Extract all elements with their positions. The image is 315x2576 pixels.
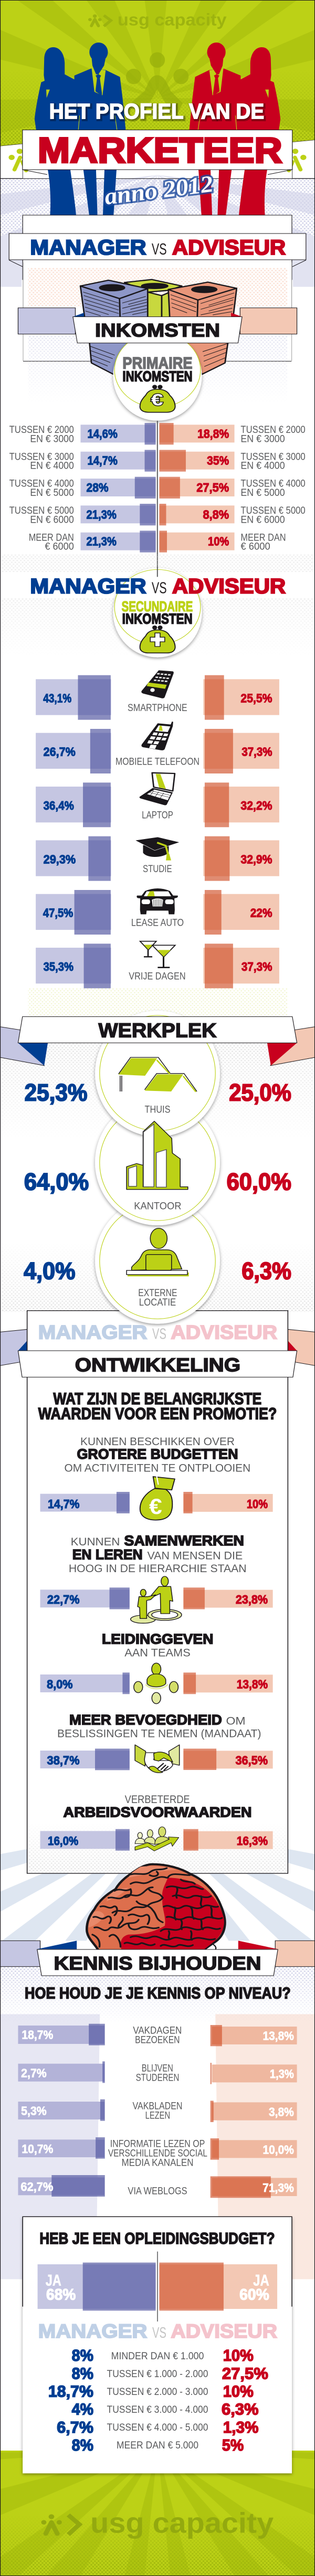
- section 3: secundaire inkomsten: [2, 555, 313, 773]
- row: leidinggeven bars: [40, 1672, 273, 1694]
- watermark: usg figure: [126, 52, 188, 119]
- label: externe locatie: [138, 1287, 177, 1308]
- label: primaire inkomsten: PRIMAIRE: [122, 354, 193, 373]
- icon: cocktail glasses: [140, 941, 175, 968]
- question: belangrijkste waarden: [38, 1390, 277, 1423]
- row: minder dan 1000: 8%: [72, 2346, 93, 2365]
- row: via weblogs: 71,3%: [262, 2181, 294, 2195]
- row: 3000 tot 4000: [72, 2400, 258, 2418]
- row: via weblogs: VIA WEBLOGS: [128, 2186, 187, 2197]
- row: lease auto: [36, 888, 279, 935]
- row: minder dan 1000: MINDER DAN € 1.000: [111, 2350, 204, 2362]
- numbers: werkplek percentages: 64,0%: [24, 1169, 89, 1195]
- banner: ontwikkeling: [18, 1351, 297, 1377]
- row: laptop: LAPTOP: [142, 810, 173, 821]
- row: vakbladen lezen: VAKBLADEN: [133, 2101, 182, 2112]
- table: opleidingsbudget bedragen: [48, 2346, 268, 2454]
- row: 3000 tot 4000: 6,3%: [222, 2400, 258, 2418]
- banner: inkomsten: [73, 317, 242, 343]
- row: vakdagen bezoeken: [18, 2024, 297, 2046]
- row: via weblogs: [18, 2175, 297, 2198]
- panel: ontwikkeling: [27, 1311, 288, 1873]
- icon: graduation cap: [135, 837, 180, 861]
- heading: manager vs adviseur: VS: [152, 579, 167, 597]
- heading: manager vs adviseur top banner: MANAGER: [30, 236, 146, 259]
- row: lease auto: LEASE AUTO: [131, 917, 184, 928]
- icon: office buildings: [127, 1121, 188, 1190]
- row: tussen 3000 en 4000: 35%: [207, 454, 229, 468]
- heading: manager vs adviseur faded: ADVISEUR: [171, 2320, 277, 2342]
- banner: ontwikkeling: ONTWIKKELING: [75, 1355, 240, 1376]
- row: grotere budgetten bars: 10%: [247, 1498, 268, 1511]
- row: meer dan 6000: MEER DAN: [29, 532, 74, 543]
- circle: secundaire inkomsten: INKOMSTEN: [122, 611, 193, 627]
- circle: thuis: [95, 1011, 220, 1137]
- ribbon ends: werkplek: [0, 1027, 315, 1066]
- row: 4000 tot 5000: [57, 2418, 258, 2436]
- text: meer bevoegdheid: BESLISSINGEN TE NEMEN (MANDAAT): [57, 1727, 261, 1740]
- row: 4000 tot 5000: TUSSEN € 4.000 - 5.000: [107, 2422, 208, 2433]
- row: informatie lezen op social media: [18, 2137, 297, 2168]
- heading: manager vs adviseur faded: [38, 2320, 277, 2342]
- row: tussen 5000 en 6000: 8,8%: [203, 508, 229, 522]
- heading: manager vs adviseur faded: MANAGER: [38, 1321, 147, 1343]
- row: informatie lezen op social media: 10,0%: [263, 2143, 294, 2157]
- heading: manager vs adviseur: MANAGER: [30, 575, 146, 598]
- row: laptop: 32,2%: [240, 799, 272, 813]
- row: tussen 4000 en 5000: EN € 5000: [30, 487, 74, 499]
- heading: manager vs adviseur top banner: VS: [152, 240, 167, 258]
- icon: car: [136, 888, 178, 914]
- label: primaire inkomsten: [122, 354, 193, 385]
- section 2: inkomsten: [9, 215, 306, 577]
- row: laptop: [36, 773, 279, 827]
- row: vakdagen bezoeken: 18,7%: [22, 2028, 53, 2042]
- row: meer dan 6000: MEER DAN: [240, 532, 286, 543]
- row: informatie lezen op social media: VERSCHILLENDE SOCIAL: [108, 2148, 207, 2159]
- text: grotere budgetten: KUNNEN BESCHIKKEN OVER: [80, 1435, 235, 1448]
- circle: secundaire inkomsten: SECUNDAIRE: [122, 599, 193, 615]
- row: leidinggeven bars: 8,0%: [47, 1678, 73, 1691]
- circle: kantoor: [95, 1099, 220, 1225]
- bar: manager ja 68%: 68%: [46, 2286, 76, 2303]
- bar: adviseur ja 60%: 60%: [239, 2286, 269, 2303]
- row: informatie lezen op social media: INFORMATIE LEZEN OP: [110, 2138, 205, 2149]
- heading: manager vs adviseur top banner: ADVISEUR: [172, 236, 286, 259]
- bar: adviseur ja 60%: JA: [253, 2272, 269, 2289]
- heading: manager vs adviseur: [30, 575, 286, 598]
- title line: het profiel van de: HET PROFIEL VAN DE: [49, 100, 264, 123]
- row: grotere budgetten bars: 14,7%: [48, 1498, 80, 1511]
- text: samenwerken en leren: HOOG IN DE HIERARCHIE STAAN: [69, 1562, 247, 1575]
- row: tussen 3000 en 4000: 14,7%: [87, 454, 118, 468]
- row: mobiele telefoon: MOBIELE TELEFOON: [116, 756, 200, 767]
- row: studie: 32,9%: [240, 853, 272, 866]
- halftone background: [2, 555, 313, 656]
- column backgrounds: [0, 2014, 315, 2279]
- row: blijven studeren: 2,7%: [21, 2066, 47, 2080]
- row: vrije dagen: 35,3%: [44, 960, 74, 974]
- row: tussen 2000 en 3000: EN € 3000: [240, 433, 285, 444]
- row: minder dan 1000: 10%: [223, 2346, 254, 2365]
- row: blijven studeren: [18, 2061, 297, 2084]
- row: vrije dagen: 37,3%: [242, 960, 272, 974]
- panel: inkomsten background: [22, 215, 293, 380]
- row: smartphone: [36, 670, 279, 720]
- row: tussen 2000 en 3000: 18,8%: [197, 427, 229, 441]
- heading: manager vs adviseur faded: VS: [152, 2324, 166, 2341]
- row: minder dan 1000: [72, 2346, 254, 2365]
- bar: manager ja 68%: [38, 2263, 156, 2310]
- row: 2000 tot 3000: 10%: [223, 2382, 254, 2400]
- row: meer dan 6000: 10%: [208, 535, 229, 548]
- row: studie: STUDIE: [143, 863, 172, 875]
- text: samenwerken en leren: SAMENWERKEN: [124, 1533, 244, 1549]
- icon: houses: [119, 1057, 197, 1092]
- silhouette: adviseur couple (red): [189, 43, 280, 227]
- row: tussen 3000 en 4000: TUSSEN € 3000: [9, 451, 74, 462]
- heading: manager vs adviseur top banner: [9, 234, 306, 267]
- header background: green sunburst: [0, 0, 315, 147]
- row: meer dan 5000: 5%: [222, 2436, 244, 2454]
- text: meer bevoegdheid: OM: [226, 1714, 246, 1727]
- title banner: marketeer: MARKETEER: [38, 131, 282, 170]
- row: bevoegdheid bars: 38,7%: [47, 1754, 80, 1767]
- text: arbeidsvoorwaarden: [64, 1793, 251, 1820]
- icon: money bag: [140, 1476, 175, 1520]
- row: 1000 tot 2000: 27,5%: [222, 2364, 268, 2382]
- icon: green logo fragments left and right of banner: [8, 149, 307, 171]
- section 10: opleidingsbudget panel: [23, 2217, 292, 2473]
- text: grotere budgetten: [64, 1435, 250, 1474]
- heading: manager vs adviseur faded: VS: [152, 1326, 166, 1342]
- row: meer dan 5000: MEER DAN € 5.000: [117, 2440, 198, 2451]
- ribbon ends: inkomsten: [18, 308, 297, 334]
- row: smartphone: 43,1%: [43, 692, 71, 705]
- row: meer dan 6000: [29, 531, 286, 553]
- row: vakdagen bezoeken: VAKDAGEN: [133, 2025, 182, 2036]
- logo: usg capacity (top): usg capacity: [118, 10, 227, 29]
- row: blijven studeren: STUDEREN: [136, 2072, 179, 2083]
- banner: werkplek: [18, 1016, 297, 1043]
- text: grotere budgetten: OM ACTIVITEITEN TE ONTPLOOIEN: [64, 1461, 250, 1474]
- icon: brain: [87, 1864, 225, 1950]
- footer: green sunburst: [0, 2449, 315, 2576]
- row: tussen 4000 en 5000: [9, 477, 306, 499]
- row: 2000 tot 3000: TUSSEN € 2.000 - 3.000: [107, 2386, 208, 2398]
- row: 1000 tot 2000: [72, 2364, 268, 2382]
- row: bevoegdheid bars: [40, 1748, 273, 1770]
- row: meer dan 6000: € 6000: [240, 541, 270, 552]
- row: tussen 3000 en 4000: [9, 450, 306, 472]
- icon: purse with euro: €: [151, 391, 163, 409]
- text: samenwerken en leren: [69, 1533, 247, 1575]
- row: samenwerken bars: 22,7%: [47, 1593, 80, 1607]
- circle: secundaire inkomsten: [113, 567, 202, 658]
- heading: manager vs adviseur faded: ADVISEUR: [171, 1321, 277, 1343]
- icon: purse with plus: [140, 626, 175, 653]
- heading: manager vs adviseur faded: MANAGER: [38, 2320, 147, 2342]
- row: tussen 4000 en 5000: 28%: [87, 481, 109, 495]
- text: arbeidsvoorwaarden: ARBEIDSVOORWAARDEN: [64, 1805, 251, 1820]
- row: 4000 tot 5000: 1,3%: [223, 2418, 258, 2436]
- numbers: werkplek percentages: [24, 1079, 291, 1285]
- numbers: werkplek percentages: 25,3%: [25, 1079, 87, 1106]
- section 7: promotie rows: [40, 1435, 273, 1704]
- section 9: kennis bijhouden: [0, 1941, 315, 2279]
- row: tussen 2000 en 3000: [9, 423, 306, 444]
- icon: stacks of banknotes: [80, 280, 237, 374]
- label: externe locatie: EXTERNE: [138, 1287, 177, 1299]
- row: vakbladen lezen: [18, 2100, 297, 2122]
- bar: manager ja 68%: JA: [46, 2272, 61, 2289]
- text: samenwerken en leren: KUNNEN: [71, 1535, 120, 1548]
- banner: inkomsten: INKOMSTEN: [95, 320, 220, 341]
- row: leidinggeven bars: 13,8%: [237, 1678, 268, 1691]
- text: samenwerken en leren: VAN MENSEN DIE: [147, 1549, 243, 1562]
- section 4: secundaire inkomsten rows: [36, 773, 279, 988]
- row: tussen 4000 en 5000: 27,5%: [196, 481, 229, 495]
- text: arbeidsvoorwaarden: VERBETERDE: [125, 1793, 190, 1806]
- circle: externe locatie: [95, 1198, 220, 1324]
- row: 1000 tot 2000: TUSSEN € 1.000 - 2.000: [107, 2368, 208, 2380]
- row: studie: 29,3%: [44, 853, 76, 866]
- numbers: werkplek percentages: 60,0%: [227, 1169, 291, 1195]
- row: meer dan 5000: 8%: [72, 2436, 93, 2454]
- background rays: kennis bijhouden: [0, 1825, 315, 1941]
- text: meer bevoegdheid: [57, 1712, 261, 1740]
- numbers: werkplek percentages: 6,3%: [242, 1258, 291, 1285]
- row: arbeidsvoorwaarden bars: 16,0%: [48, 1835, 78, 1848]
- row: smartphone: SMARTPHONE: [128, 702, 187, 714]
- axis: primaire inkomsten center line: [157, 421, 158, 577]
- halftone background: [1, 1967, 314, 2012]
- row: tussen 4000 en 5000: TUSSEN € 4000: [9, 478, 74, 489]
- row: vakbladen lezen: 5,3%: [21, 2104, 47, 2118]
- icon: laptop: [140, 773, 175, 805]
- row: 3000 tot 4000: 4%: [72, 2400, 93, 2418]
- title line: het profiel van de: HET PROFIEL VAN DE: [50, 101, 265, 124]
- row: tussen 2000 en 3000: EN € 3000: [30, 433, 74, 444]
- row: vakdagen bezoeken: BEZOEKEN: [135, 2034, 180, 2045]
- silhouette: manager couple (blue): [35, 43, 126, 227]
- row: arbeidsvoorwaarden bars: [40, 1829, 273, 1851]
- heading: manager vs adviseur: ADVISEUR: [172, 575, 286, 598]
- subtitle: anno 2012: anno 2012: [102, 171, 215, 210]
- row: tussen 3000 en 4000: EN € 4000: [30, 460, 74, 471]
- circle: primaire inkomsten: [113, 331, 202, 421]
- icon: two people on discs: [131, 1576, 182, 1623]
- row: vrije dagen: [36, 941, 279, 988]
- row: 4000 tot 5000: 6,7%: [57, 2418, 93, 2436]
- row: 3000 tot 4000: TUSSEN € 3.000 - 4.000: [107, 2404, 208, 2415]
- icon: handshake: [135, 1745, 180, 1773]
- row: mobiele telefoon: 26,7%: [44, 745, 76, 759]
- logo: usg capacity (bottom): usg capacity: [90, 2507, 274, 2539]
- row: tussen 3000 en 4000: EN € 4000: [240, 460, 285, 471]
- row: meer dan 5000: [72, 2436, 244, 2454]
- row: meer dan 6000: € 6000: [45, 541, 74, 552]
- text: leidinggeven: LEIDINGGEVEN: [102, 1631, 213, 1647]
- row: smartphone: 25,5%: [240, 692, 272, 705]
- banner: kennis bijhouden: [37, 1949, 278, 1976]
- row: tussen 2000 en 3000: 14,6%: [87, 427, 118, 441]
- row: 1000 tot 2000: 8%: [72, 2364, 93, 2382]
- numbers: werkplek percentages: 4,0%: [24, 1258, 75, 1285]
- section 5: werkplek circles: THUIS: [145, 1104, 170, 1115]
- row: tussen 5000 en 6000: EN € 6000: [240, 514, 285, 525]
- row: 2000 tot 3000: 18,7%: [48, 2382, 93, 2400]
- label: primaire inkomsten: INKOMSTEN: [122, 369, 193, 385]
- row: grotere budgetten bars: [40, 1492, 273, 1513]
- banner: kennis bijhouden: KENNIS BIJHOUDEN: [54, 1953, 261, 1974]
- ribbon ends: ontwikkeling: [0, 1329, 315, 1365]
- bar: adviseur ja 60%: [159, 2263, 277, 2310]
- text: leidinggeven: [102, 1631, 213, 1659]
- row: informatie lezen op social media: 10,7%: [22, 2143, 53, 2156]
- row: via weblogs: 62,7%: [20, 2180, 53, 2194]
- row: tussen 5000 en 6000: 21,3%: [87, 508, 117, 522]
- section 5: werkplek circles: KANTOOR: [134, 1201, 182, 1212]
- row: tussen 4000 en 5000: EN € 5000: [240, 487, 285, 499]
- section 8: promotie rows continued: [40, 1712, 273, 1851]
- icon: smartphone: [141, 670, 174, 698]
- icon: money bag: €: [149, 1494, 162, 1519]
- white ribbon band behind the title: [0, 140, 315, 287]
- row: informatie lezen op social media: MEDIA KANALEN: [122, 2157, 193, 2168]
- text: leidinggeven: AAN TEAMS: [124, 1646, 191, 1659]
- row: tussen 5000 en 6000: [9, 504, 306, 525]
- icon: team leader: [134, 1663, 178, 1704]
- row: lease auto: 22%: [250, 906, 272, 920]
- text: meer bevoegdheid: MEER BEVOEGDHEID: [69, 1712, 222, 1728]
- row: meer dan 6000: 21,3%: [87, 535, 117, 548]
- icon: mobile phone: [141, 722, 173, 750]
- row: studie: [36, 836, 279, 881]
- row: vrije dagen: VRIJE DAGEN: [129, 971, 186, 982]
- text: samenwerken en leren: EN LEREN: [72, 1547, 143, 1563]
- row: arbeidsvoorwaarden bars: 16,3%: [237, 1835, 268, 1848]
- section 5: werkplek circles: [18, 1011, 297, 1324]
- row: laptop: 36,4%: [44, 799, 74, 813]
- row: tussen 5000 en 6000: TUSSEN € 5000: [9, 505, 74, 516]
- row: vakbladen lezen: LEZEN: [145, 2110, 170, 2121]
- row: mobiele telefoon: [36, 722, 279, 773]
- icon: purse with euro: [140, 385, 175, 412]
- row: 2000 tot 3000: [48, 2382, 254, 2400]
- row: samenwerken bars: [40, 1587, 273, 1609]
- banner: werkplek: WERKPLEK: [98, 1019, 217, 1042]
- row: tussen 5000 en 6000: EN € 6000: [30, 514, 74, 525]
- row: lease auto: 47,5%: [43, 906, 73, 920]
- numbers: werkplek percentages: 25,0%: [229, 1079, 291, 1106]
- row: bevoegdheid bars: 36,5%: [235, 1754, 268, 1767]
- section 5: werkplek background: [1, 988, 314, 1312]
- heading: manager vs adviseur faded: [38, 1321, 277, 1343]
- section 6: ontwikkeling header: [18, 1321, 297, 1423]
- row: vakbladen lezen: 3,8%: [269, 2105, 294, 2119]
- row: vakdagen bezoeken: 13,8%: [263, 2029, 294, 2043]
- row: samenwerken bars: 23,8%: [236, 1593, 268, 1607]
- row: tussen 2000 en 3000: TUSSEN € 2000: [9, 424, 74, 436]
- text: grotere budgetten: GROTERE BUDGETTEN: [77, 1447, 238, 1462]
- axis: budget center line: [157, 2252, 158, 2321]
- icon: person at laptop: [127, 1228, 189, 1276]
- ribbon ends: kennis bijhouden: [0, 1941, 315, 1967]
- row: blijven studeren: 1,3%: [270, 2068, 294, 2081]
- row: mobiele telefoon: 37,3%: [242, 745, 272, 759]
- row: blijven studeren: BLIJVEN: [142, 2063, 173, 2074]
- icon: people on rising arrow: [135, 1827, 179, 1851]
- label: externe locatie: LOCATIE: [139, 1297, 176, 1308]
